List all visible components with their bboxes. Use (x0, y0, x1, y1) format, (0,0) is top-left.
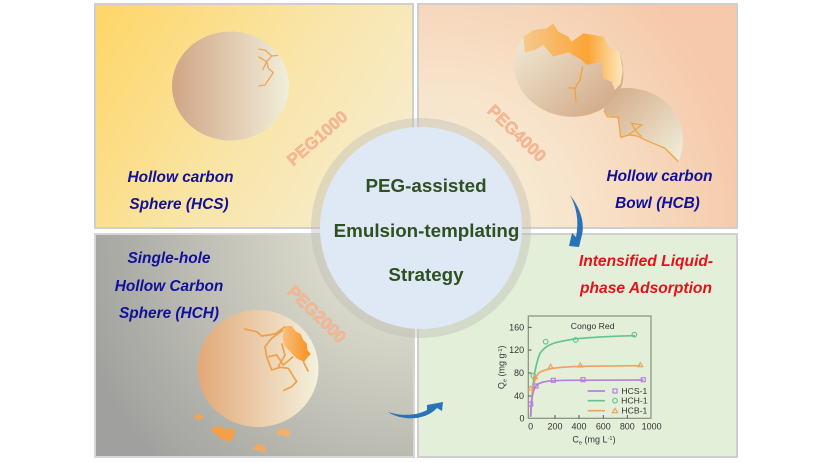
axis titles: C (572, 435, 579, 445)
text: Single-hole Hollow Carbon Sphere (HCH): Sphere (HCH) (119, 305, 219, 322)
label: PEG2000: PEG2000 (284, 282, 350, 347)
y axis title: (mg g (497, 354, 507, 379)
x axis labels (528, 421, 662, 431)
central circle (311, 118, 531, 338)
x axis labels: 1000 (642, 421, 662, 431)
text: Single-hole Hollow Carbon Sphere (HCH): Hollow Carbon (115, 278, 223, 295)
y axis title: e (502, 379, 508, 382)
text: Hollow carbon Sphere (HCS) (127, 169, 234, 213)
label: PEG4000: PEG4000 (484, 101, 550, 166)
y axis title: ) (497, 345, 507, 348)
axis titles: (mg L (582, 435, 608, 445)
text: Hollow carbon Bowl (HCB) (606, 168, 713, 212)
y axis labels: 0 (519, 413, 524, 423)
icon: shell fragments (194, 413, 290, 453)
label: PEG1000: PEG1000 (283, 107, 351, 170)
y axis labels: 40 (514, 391, 524, 401)
text: Single-hole Hollow Carbon Sphere (HCH): Single-hole (128, 250, 211, 267)
y axis labels: 80 (514, 368, 524, 378)
x axis labels: 800 (620, 421, 635, 431)
x axis labels: 0 (528, 421, 533, 431)
panel: intensified liquid-phase adsorption (418, 234, 737, 457)
axis titles: -1 (608, 436, 613, 442)
arrow: HCB to adsorption (569, 195, 583, 247)
legend (588, 386, 648, 416)
series: HCS-1 (529, 378, 645, 417)
chart: Congo Red adsorption isotherm (497, 316, 662, 446)
text: Single-hole Hollow Carbon Sphere (HCH) (115, 250, 223, 322)
panel: single-hole hollow carbon sphere (95, 234, 414, 457)
icon: broken bowls HCB (514, 23, 683, 162)
text: Intensified Liquid-phase Adsorption: phase Adsorption (579, 280, 712, 297)
text: Intensified Liquid-phase Adsorption (579, 253, 713, 297)
text: Hollow carbon Sphere (HCS): Hollow carbon (127, 169, 234, 186)
panel: hollow carbon bowl (418, 4, 737, 228)
x axis labels: 400 (571, 421, 586, 431)
icon: cracked sphere HCS (172, 32, 289, 140)
x axis labels: 600 (596, 421, 611, 431)
y axis title: Q (497, 382, 507, 389)
text: PEG-assisted Emulsion-templating Strategy: Strategy (388, 264, 464, 285)
text: Hollow carbon Bowl (HCB): Hollow carbon (606, 168, 713, 185)
series: HCB-1 (528, 363, 643, 417)
y axis labels (509, 322, 524, 423)
text: PEG-assisted Emulsion-templating Strategy: PEG-assisted (365, 175, 487, 196)
chart title: Congo Red (571, 321, 615, 331)
text: PEG-assisted Emulsion-templating Strategy (334, 175, 519, 285)
y axis labels: 120 (509, 345, 524, 355)
icon: sphere with hole HCH (198, 310, 318, 427)
x axis labels: 200 (547, 421, 562, 431)
axis titles: ) (613, 435, 616, 445)
legend: HCS-1 (621, 386, 647, 396)
text: Intensified Liquid-phase Adsorption: Intensified Liquid- (579, 253, 713, 270)
arrow: HCH to adsorption (388, 402, 443, 418)
y axis title: -1 (498, 348, 504, 354)
axis titles: e (579, 440, 582, 446)
legend: HCH-1 (621, 396, 648, 406)
text: PEG-assisted Emulsion-templating Strategy: Emulsion-templating (334, 220, 519, 241)
panel: hollow carbon sphere (95, 4, 413, 228)
series: HCH-1 (531, 332, 637, 417)
text: Hollow carbon Sphere (HCS): Sphere (HCS) (129, 196, 229, 213)
y axis labels: 160 (509, 322, 524, 332)
text: Hollow carbon Bowl (HCB): Bowl (HCB) (615, 195, 700, 212)
legend: HCB-1 (621, 406, 647, 416)
